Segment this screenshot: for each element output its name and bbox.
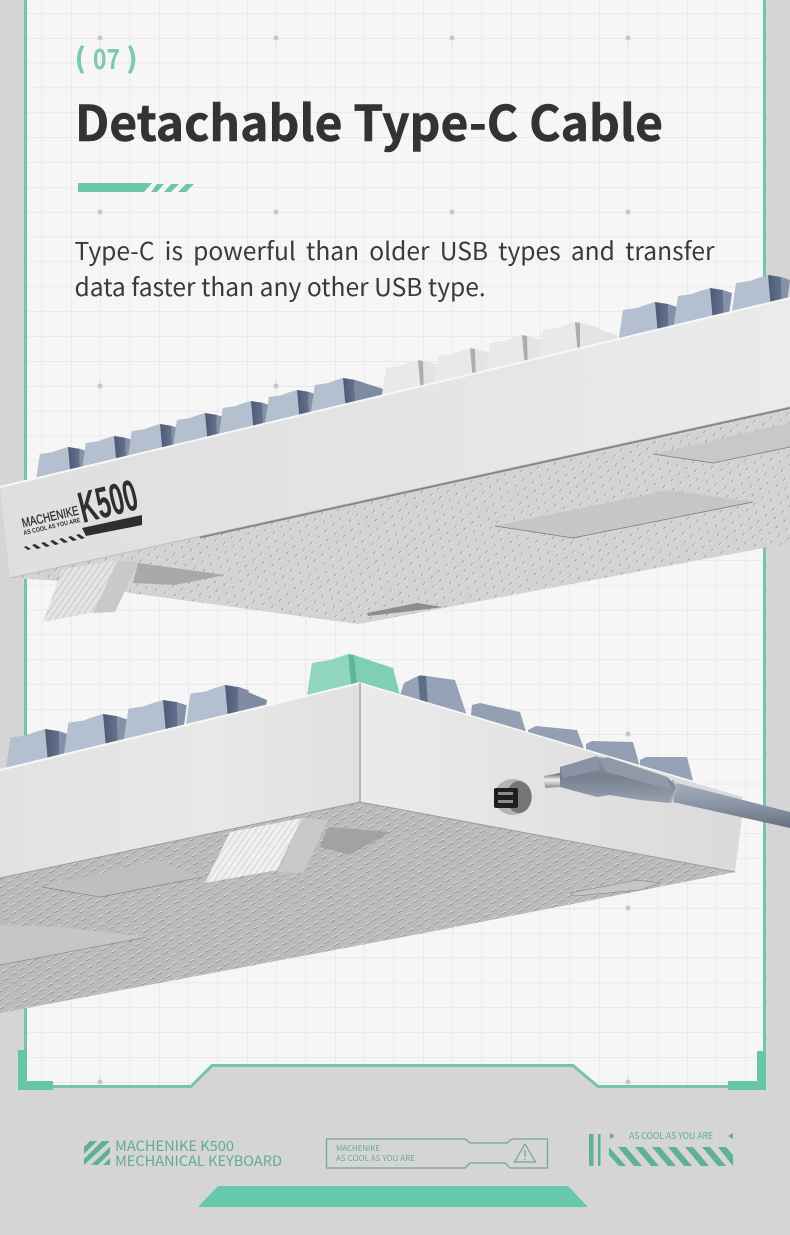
footer label with warning icon (326, 1139, 548, 1168)
footer brand: text (115, 1136, 282, 1171)
footer tag: as cool as you are: AS COOL AS YOU ARE (629, 1129, 713, 1142)
keycaps: white row (381, 322, 617, 402)
logo: K500: K500 (74, 471, 143, 533)
icon: warning triangle (514, 1144, 536, 1162)
logo: K500: MACHENIKE (20, 503, 80, 530)
keycaps: left blue row (5, 685, 267, 774)
body text: Type-C is powerful than older USB types and transfer (74, 232, 714, 268)
body text (74, 232, 715, 304)
underside (10, 407, 790, 624)
Type-C cable (544, 756, 790, 828)
keyboard: corner view with Type-C port (0, 654, 790, 1013)
keycaps: right blue row (400, 675, 698, 800)
section number: 07 (93, 38, 120, 78)
footer label with warning icon: AS COOL AS YOU ARE (336, 1153, 415, 1164)
footer brand: text: MACHENIKE K500 (115, 1136, 234, 1156)
footer label with warning icon: MACHENIKE (336, 1143, 380, 1154)
footer brand: text: MECHANICAL KEYBOARD (115, 1151, 282, 1171)
logo: K500: AS COOL AS YOU ARE (23, 517, 81, 537)
section number (75, 37, 137, 78)
kickstand (205, 818, 390, 883)
section number: ) (127, 37, 137, 76)
accent bar (78, 183, 194, 192)
keycaps: left blue row (35, 378, 383, 484)
USB-C port (494, 779, 532, 815)
logo: K500 (20, 471, 143, 550)
keyboard: top view of back with K500 logo (0, 275, 790, 624)
left face (0, 683, 360, 878)
right face (360, 683, 742, 872)
section number: ( (75, 37, 85, 76)
title: Detachable Type-C Cable (75, 85, 663, 156)
keycap: mint accent (307, 654, 400, 695)
footer brand: icon (84, 1141, 110, 1165)
kickstand (43, 560, 225, 622)
keycaps: right blue row (618, 275, 790, 344)
body text: data faster than any other USB type. (74, 268, 486, 304)
footer tag: as cool as you are (589, 1129, 733, 1166)
front edge (0, 298, 790, 578)
underside (0, 802, 735, 1013)
footer bar (198, 1186, 588, 1207)
